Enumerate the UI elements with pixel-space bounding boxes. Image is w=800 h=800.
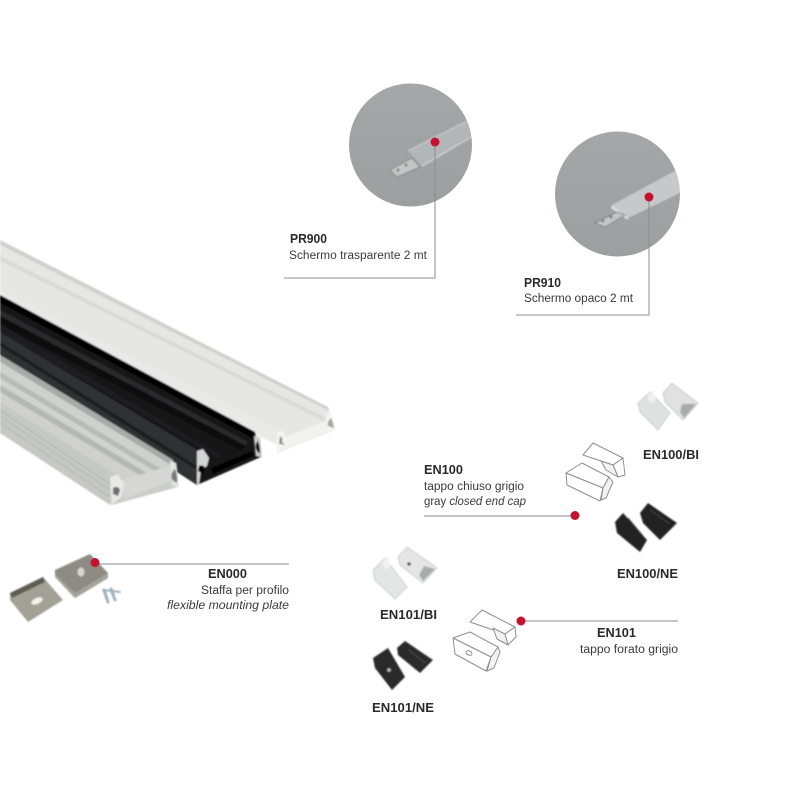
product photo: three aluminium profiles [0, 240, 336, 505]
EN100 callout: EN100 [424, 463, 463, 477]
label: Schermo opaco 2 mt [524, 293, 634, 305]
label [289, 232, 428, 262]
EN101/BI white drilled caps [373, 547, 437, 599]
red dot [644, 192, 654, 202]
circle photo [349, 84, 472, 206]
EN101 callout: EN101 [597, 626, 636, 640]
EN100 callout [424, 463, 580, 520]
plate 1 [55, 554, 108, 598]
label: Schermo trasparente 2 mt [289, 250, 428, 262]
EN000 callout [90, 558, 289, 612]
EN100 callout: gray closed end cap [424, 496, 527, 508]
red dot [430, 138, 440, 146]
white profile [0, 240, 336, 453]
PR910 detail: opaque screen [516, 125, 685, 315]
callout line [516, 197, 649, 315]
EN100 grey closed caps outline drawing [566, 443, 625, 501]
EN000 mounting plates and screws [10, 554, 120, 622]
label [524, 276, 634, 305]
EN101 callout: tappo forato grigio [580, 644, 678, 656]
EN000 callout: flexible mounting plate [167, 600, 289, 612]
plate 2 [10, 577, 63, 622]
black profile [0, 295, 262, 485]
EN101 grey drilled caps outline drawing [453, 610, 516, 671]
label: EN100/NE: EN100/NE [617, 567, 678, 581]
silver profile [0, 355, 179, 505]
EN100/BI white closed caps [638, 383, 698, 430]
EN000 callout: EN000 [208, 567, 247, 581]
label: EN100/BI: EN100/BI [643, 448, 699, 462]
EN100/NE black closed caps [615, 503, 677, 552]
label: EN101/BI: EN101/BI [380, 608, 437, 622]
EN101/NE black drilled caps [373, 641, 433, 690]
PR900 detail: transparent screen [284, 80, 480, 278]
EN101 callout [516, 616, 678, 656]
circle photo [555, 132, 680, 256]
EN100 callout: tappo chiuso grigio [424, 481, 524, 493]
label: PR900 [290, 232, 327, 246]
callout line [284, 142, 435, 278]
screws [103, 589, 120, 602]
label: PR910 [524, 276, 561, 290]
EN000 callout: Staffa per profilo [201, 585, 289, 597]
label: EN101/NE: EN101/NE [372, 701, 434, 715]
